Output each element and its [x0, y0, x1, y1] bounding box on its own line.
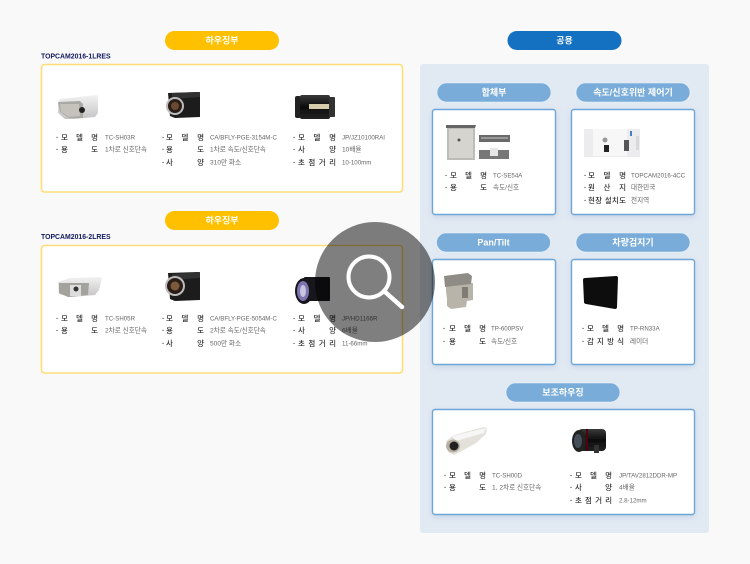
product card: controller — [572, 110, 694, 214]
spec list: TC-SH03R: 모델명 — [61, 132, 98, 142]
spec list: JP/JZ10100RAI: 초점거리 — [298, 157, 336, 167]
spec list: TOPCAM2016-4CC: 대한민국 — [631, 182, 655, 192]
spec list: JP/HD1166R: 11-66mm — [342, 340, 367, 348]
panel: housing set 2 — [41, 211, 402, 373]
heading pill: 차량검지기 — [576, 233, 690, 252]
spec list: TP-600PSV: 용도 — [449, 337, 486, 346]
spec list: TOPCAM2016-4CC: 현장 설치도 — [588, 195, 626, 205]
spec list: TP-600PSV — [443, 323, 524, 346]
panel background — [420, 64, 709, 533]
spec list: CA/BFLY-PGE-5054M-C — [162, 313, 277, 348]
product card — [42, 64, 402, 192]
spec list: TP-600PSV: · — [443, 337, 446, 346]
spec list: TC-SH03R: 1차로 신호단속 — [105, 144, 147, 154]
icon: FLIR camera — [166, 92, 200, 118]
spec list: TC-SH03R — [56, 132, 147, 154]
spec list: CA/BFLY-PGE-3154M-C: 용도 — [166, 145, 204, 154]
spec list: JP/JZ10100RAI: · — [293, 133, 296, 142]
heading pill: 보조하우징: 보조하우징 — [542, 386, 584, 398]
spec list: TC-SH00D: · — [444, 483, 446, 492]
spec list: TC-SE54A: 모델명 — [450, 170, 487, 180]
spec list: TP-600PSV: 모델명 — [449, 323, 486, 333]
icon: zoom lens — [295, 277, 330, 304]
spec list: TOPCAM2016-4CC: · — [584, 196, 586, 205]
spec list: JP/HD1166R: 초점거리 — [298, 338, 336, 348]
product card: enclosure — [432, 110, 556, 214]
spec list: JP/JZ10100RAI: · — [293, 145, 296, 154]
spec list: TC-SH05R: 2차로 신호단속 — [105, 326, 147, 334]
spec list: TP-RN33A: 감지방식 — [587, 336, 624, 346]
spec list: CA/BFLY-PGE-5054M-C: 모델명 — [166, 313, 204, 323]
spec list: TC-SH05R — [56, 313, 147, 335]
spec list: TP-RN33A: TP-RN33A — [630, 326, 661, 332]
spec list: TOPCAM2016-4CC: 모델명 — [588, 170, 626, 180]
spec list: CA/BFLY-PGE-5054M-C: 2차로 속도/신호단속 — [210, 326, 266, 334]
icon: white camera housing — [58, 95, 98, 119]
spec list: JP/HD1166R — [293, 313, 378, 348]
heading pill: 함체부 — [437, 83, 551, 102]
spec list: TP-RN33A — [582, 323, 661, 346]
spec list: TC-SH05R: TC-SH05R — [105, 316, 136, 322]
spec list: TOPCAM2016-4CC: 원산지 — [588, 182, 626, 192]
model name: TOPCAM2016-2LRES: TOPCAM2016-2LRES — [41, 234, 111, 241]
icon: enclosure and rack units — [446, 125, 510, 160]
spec list: JP/JZ10100RAI: 10-100mm — [342, 160, 371, 166]
spec list: TP-RN33A: 모델명 — [587, 323, 624, 333]
spec list: TP-RN33A: · — [582, 324, 584, 333]
spec list: JP/JZ10100RAI: JP/JZ10100RAI — [342, 134, 385, 142]
spec list: JP/JZ10100RAI: 사양 — [298, 144, 336, 154]
icon: white bullet housing — [446, 427, 487, 455]
icon: pan/tilt unit — [444, 273, 473, 309]
heading pill: 하우징부: 하우징부 — [205, 214, 239, 226]
heading pill: 하우징부: 하우징부 — [205, 34, 239, 46]
spec list: CA/BFLY-PGE-3154M-C: · — [162, 158, 164, 167]
spec list: CA/BFLY-PGE-3154M-C: 310만 화소 — [210, 158, 241, 166]
spec list: JP/TAV2812DDR-MP: 초점거리 — [575, 495, 612, 505]
spec list: JP/TAV2812DDR-MP: JP/TAV2812DDR-MP — [619, 472, 677, 480]
spec list: CA/BFLY-PGE-5054M-C: CA/BFLY-PGE-5054M-C — [210, 316, 277, 322]
spec list: CA/BFLY-PGE-5054M-C: · — [162, 314, 164, 323]
spec list: TC-SH05R: 용도 — [61, 326, 98, 335]
spec list: CA/BFLY-PGE-5054M-C: 500만 화소 — [210, 338, 241, 348]
icon: zoom lens — [295, 95, 335, 119]
spec list: TC-SH00D: 용도 — [449, 483, 486, 492]
heading pill: 공용: 공용 — [556, 36, 573, 46]
spec list: JP/TAV2812DDR-MP: 모델명 — [575, 470, 612, 480]
spec list: JP/TAV2812DDR-MP: 2.8-12mm — [619, 498, 647, 504]
product card: pan/tilt — [432, 260, 556, 364]
spec list: TC-SH03R: · — [56, 145, 58, 154]
model name: TOPCAM2016-1LRES: TOPCAM2016-1LRES — [41, 54, 111, 60]
icon: magnifier overlay — [315, 222, 435, 342]
product card — [42, 246, 402, 373]
spec list: CA/BFLY-PGE-3154M-C: 모델명 — [166, 132, 204, 142]
product card: auxiliary housing — [432, 410, 694, 514]
icon: controller rack — [584, 129, 640, 157]
spec list: JP/TAV2812DDR-MP: · — [570, 496, 572, 505]
spec list: TC-SH00D: 모델명 — [449, 470, 486, 480]
heading pill: 함체부: 함체부 — [482, 86, 506, 98]
spec list: TC-SE54A: 속도/신호 — [493, 182, 519, 192]
spec list: CA/BFLY-PGE-3154M-C: · — [162, 145, 164, 154]
spec list: TC-SH00D — [444, 470, 541, 492]
spec list: TC-SH05R: · — [56, 314, 58, 323]
heading pill: 하우징부 — [165, 31, 279, 50]
spec list: TOPCAM2016-4CC — [584, 170, 686, 205]
spec list: TC-SE54A: 용도 — [450, 183, 487, 192]
spec list: TC-SE54A: · — [445, 183, 448, 192]
spec list: TC-SH03R: · — [56, 133, 58, 142]
spec list: TP-RN33A: · — [582, 337, 584, 346]
heading pill: 차량검지기: 차량검지기 — [612, 236, 654, 248]
spec list: JP/TAV2812DDR-MP: 사양 — [575, 482, 612, 492]
spec list: CA/BFLY-PGE-3154M-C: 사양 — [166, 157, 204, 167]
spec list: TOPCAM2016-4CC: TOPCAM2016-4CC — [631, 172, 686, 180]
spec list: TC-SH05R: 모델명 — [61, 313, 98, 323]
panel: housing set 1 — [41, 31, 402, 192]
spec list: JP/HD1166R: · — [293, 314, 296, 323]
spec list: TC-SE54A — [445, 170, 523, 192]
spec list: CA/BFLY-PGE-5054M-C: 사양 — [166, 338, 204, 348]
spec list: TC-SH05R: · — [56, 326, 58, 335]
spec list: JP/HD1166R: 사양 — [298, 325, 336, 335]
spec list: CA/BFLY-PGE-5054M-C: · — [162, 326, 164, 335]
spec list: TOPCAM2016-4CC: · — [584, 171, 586, 180]
spec list: TP-600PSV: TP-600PSV — [491, 326, 524, 332]
spec list: TP-600PSV: 속도/신호 — [491, 336, 517, 346]
heading pill: 속도/신호위반 제어기 — [576, 83, 690, 102]
panel: common parts — [420, 64, 709, 533]
spec list: TC-SH00D: · — [444, 471, 446, 480]
heading pill: Pan/Tilt — [436, 233, 550, 252]
heading pill: 속도/신호위반 제어기: 속도/신호위반 제어기 — [593, 86, 673, 98]
spec list: TC-SE54A: · — [445, 171, 448, 180]
spec list: CA/BFLY-PGE-5054M-C: · — [162, 339, 164, 348]
spec list: JP/JZ10100RAI: 모델명 — [298, 132, 336, 142]
spec list: TOPCAM2016-4CC: 전지역 — [631, 196, 649, 204]
icon: FLIR camera — [165, 272, 200, 301]
spec list: TP-RN33A: 레이더 — [630, 336, 648, 346]
spec list: JP/HD1166R: · — [293, 326, 296, 335]
spec list: JP/TAV2812DDR-MP — [570, 470, 677, 505]
heading pill: 하우징부 — [165, 211, 279, 230]
spec list: JP/HD1166R: · — [293, 339, 296, 348]
spec list: CA/BFLY-PGE-5054M-C: 용도 — [166, 326, 204, 335]
spec list: TC-SH00D: 1, 2차로 신호단속 — [492, 482, 541, 492]
spec list: TC-SH03R: 용도 — [61, 145, 98, 154]
spec list: JP/JZ10100RAI: 10배율 — [342, 144, 361, 154]
spec list: TC-SE54A: TC-SE54A — [493, 172, 523, 180]
icon: radar detector — [583, 276, 618, 309]
spec list: JP/TAV2812DDR-MP: · — [570, 471, 572, 480]
spec list: JP/TAV2812DDR-MP: 4배율 — [619, 482, 635, 492]
product card: vehicle detector — [572, 260, 694, 364]
icon: varifocal lens — [572, 429, 606, 453]
spec list: JP/HD1166R: 모델명 — [298, 313, 336, 323]
heading pill: 보조하우징 — [506, 383, 620, 402]
spec list: TC-SH03R: TC-SH03R — [105, 134, 136, 142]
heading pill: Pan/Tilt: Pan/Tilt — [477, 238, 510, 248]
heading pill: 공용 — [508, 31, 622, 50]
spec list: TC-SH00D: TC-SH00D — [492, 472, 523, 480]
spec list: JP/HD1166R: 6배율 — [342, 326, 358, 334]
spec list: CA/BFLY-PGE-3154M-C: 1차로 속도/신호단속 — [210, 144, 266, 154]
spec list: JP/HD1166R: JP/HD1166R — [342, 316, 378, 322]
spec list: JP/TAV2812DDR-MP: · — [570, 483, 572, 492]
spec list: TP-600PSV: · — [443, 324, 446, 333]
spec list: TOPCAM2016-4CC: · — [584, 183, 586, 192]
spec list: CA/BFLY-PGE-3154M-C: CA/BFLY-PGE-3154M-C — [210, 134, 277, 142]
spec list: CA/BFLY-PGE-3154M-C: · — [162, 133, 164, 142]
spec list: JP/JZ10100RAI — [293, 132, 385, 167]
icon: white camera housing — [58, 277, 102, 297]
spec list: JP/JZ10100RAI: · — [293, 158, 296, 167]
spec list: CA/BFLY-PGE-3154M-C — [162, 132, 277, 167]
